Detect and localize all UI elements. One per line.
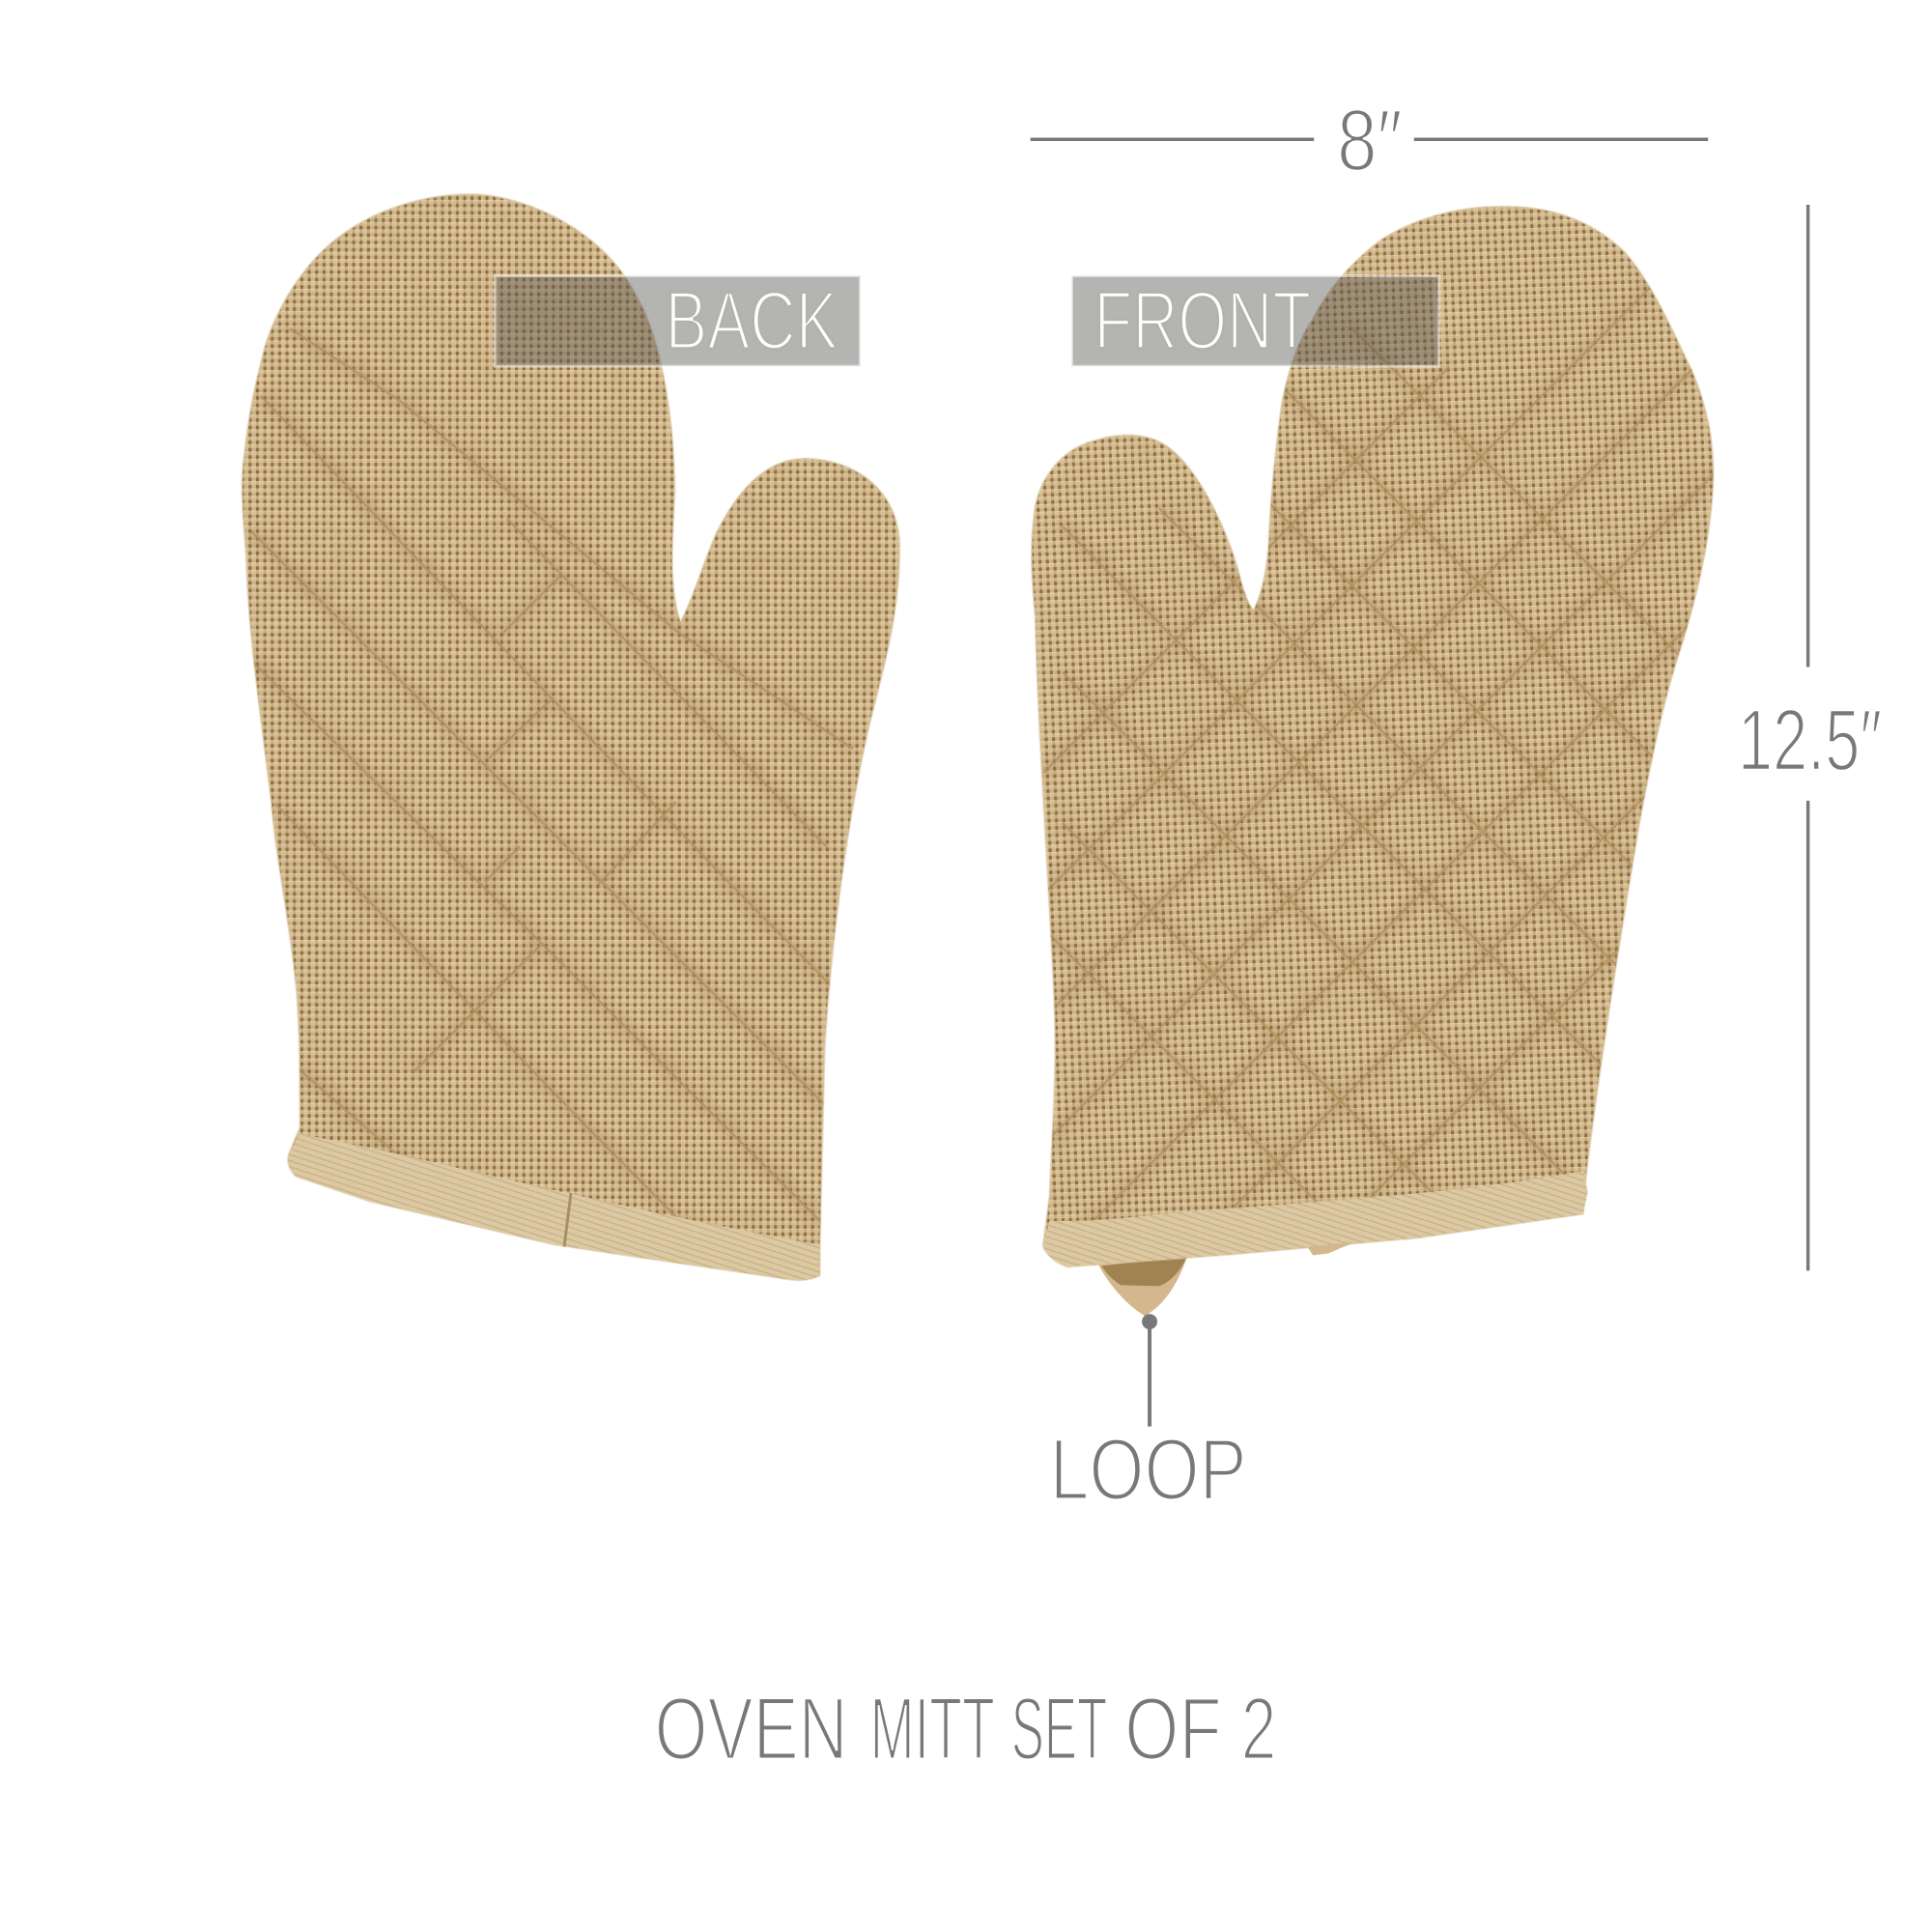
title: OVEN: [655, 1680, 848, 1778]
back label text: BACK: [666, 275, 838, 367]
title: MITT: [869, 1680, 995, 1778]
width value: 8″: [1337, 92, 1403, 188]
hanging loop: [1096, 1246, 1190, 1316]
title: OF: [1124, 1680, 1222, 1778]
title: SET: [1011, 1680, 1107, 1778]
front mitt quilted diamond seams: [1036, 236, 1714, 1261]
front label: [1071, 275, 1439, 367]
front label text: FRONT: [1094, 275, 1311, 367]
front mitt cuff binding: [1043, 1171, 1588, 1266]
back mitt cuff fold: [564, 1193, 571, 1247]
back oven mitt: [222, 183, 913, 1288]
back label: [495, 275, 861, 367]
front oven mitt: [1030, 205, 1715, 1316]
loop label: LOOP: [1050, 1421, 1247, 1518]
loop callout: [1050, 1314, 1247, 1518]
height value: 12.5″: [1738, 692, 1882, 788]
back mitt burlap body: [242, 194, 899, 1280]
front mitt burlap body: [1032, 207, 1714, 1266]
front mitt small cuff flap: [1307, 1242, 1355, 1256]
back mitt cuff binding: [288, 1134, 820, 1280]
back mitt quilted seams: [245, 201, 893, 1232]
title: 2: [1241, 1680, 1276, 1778]
